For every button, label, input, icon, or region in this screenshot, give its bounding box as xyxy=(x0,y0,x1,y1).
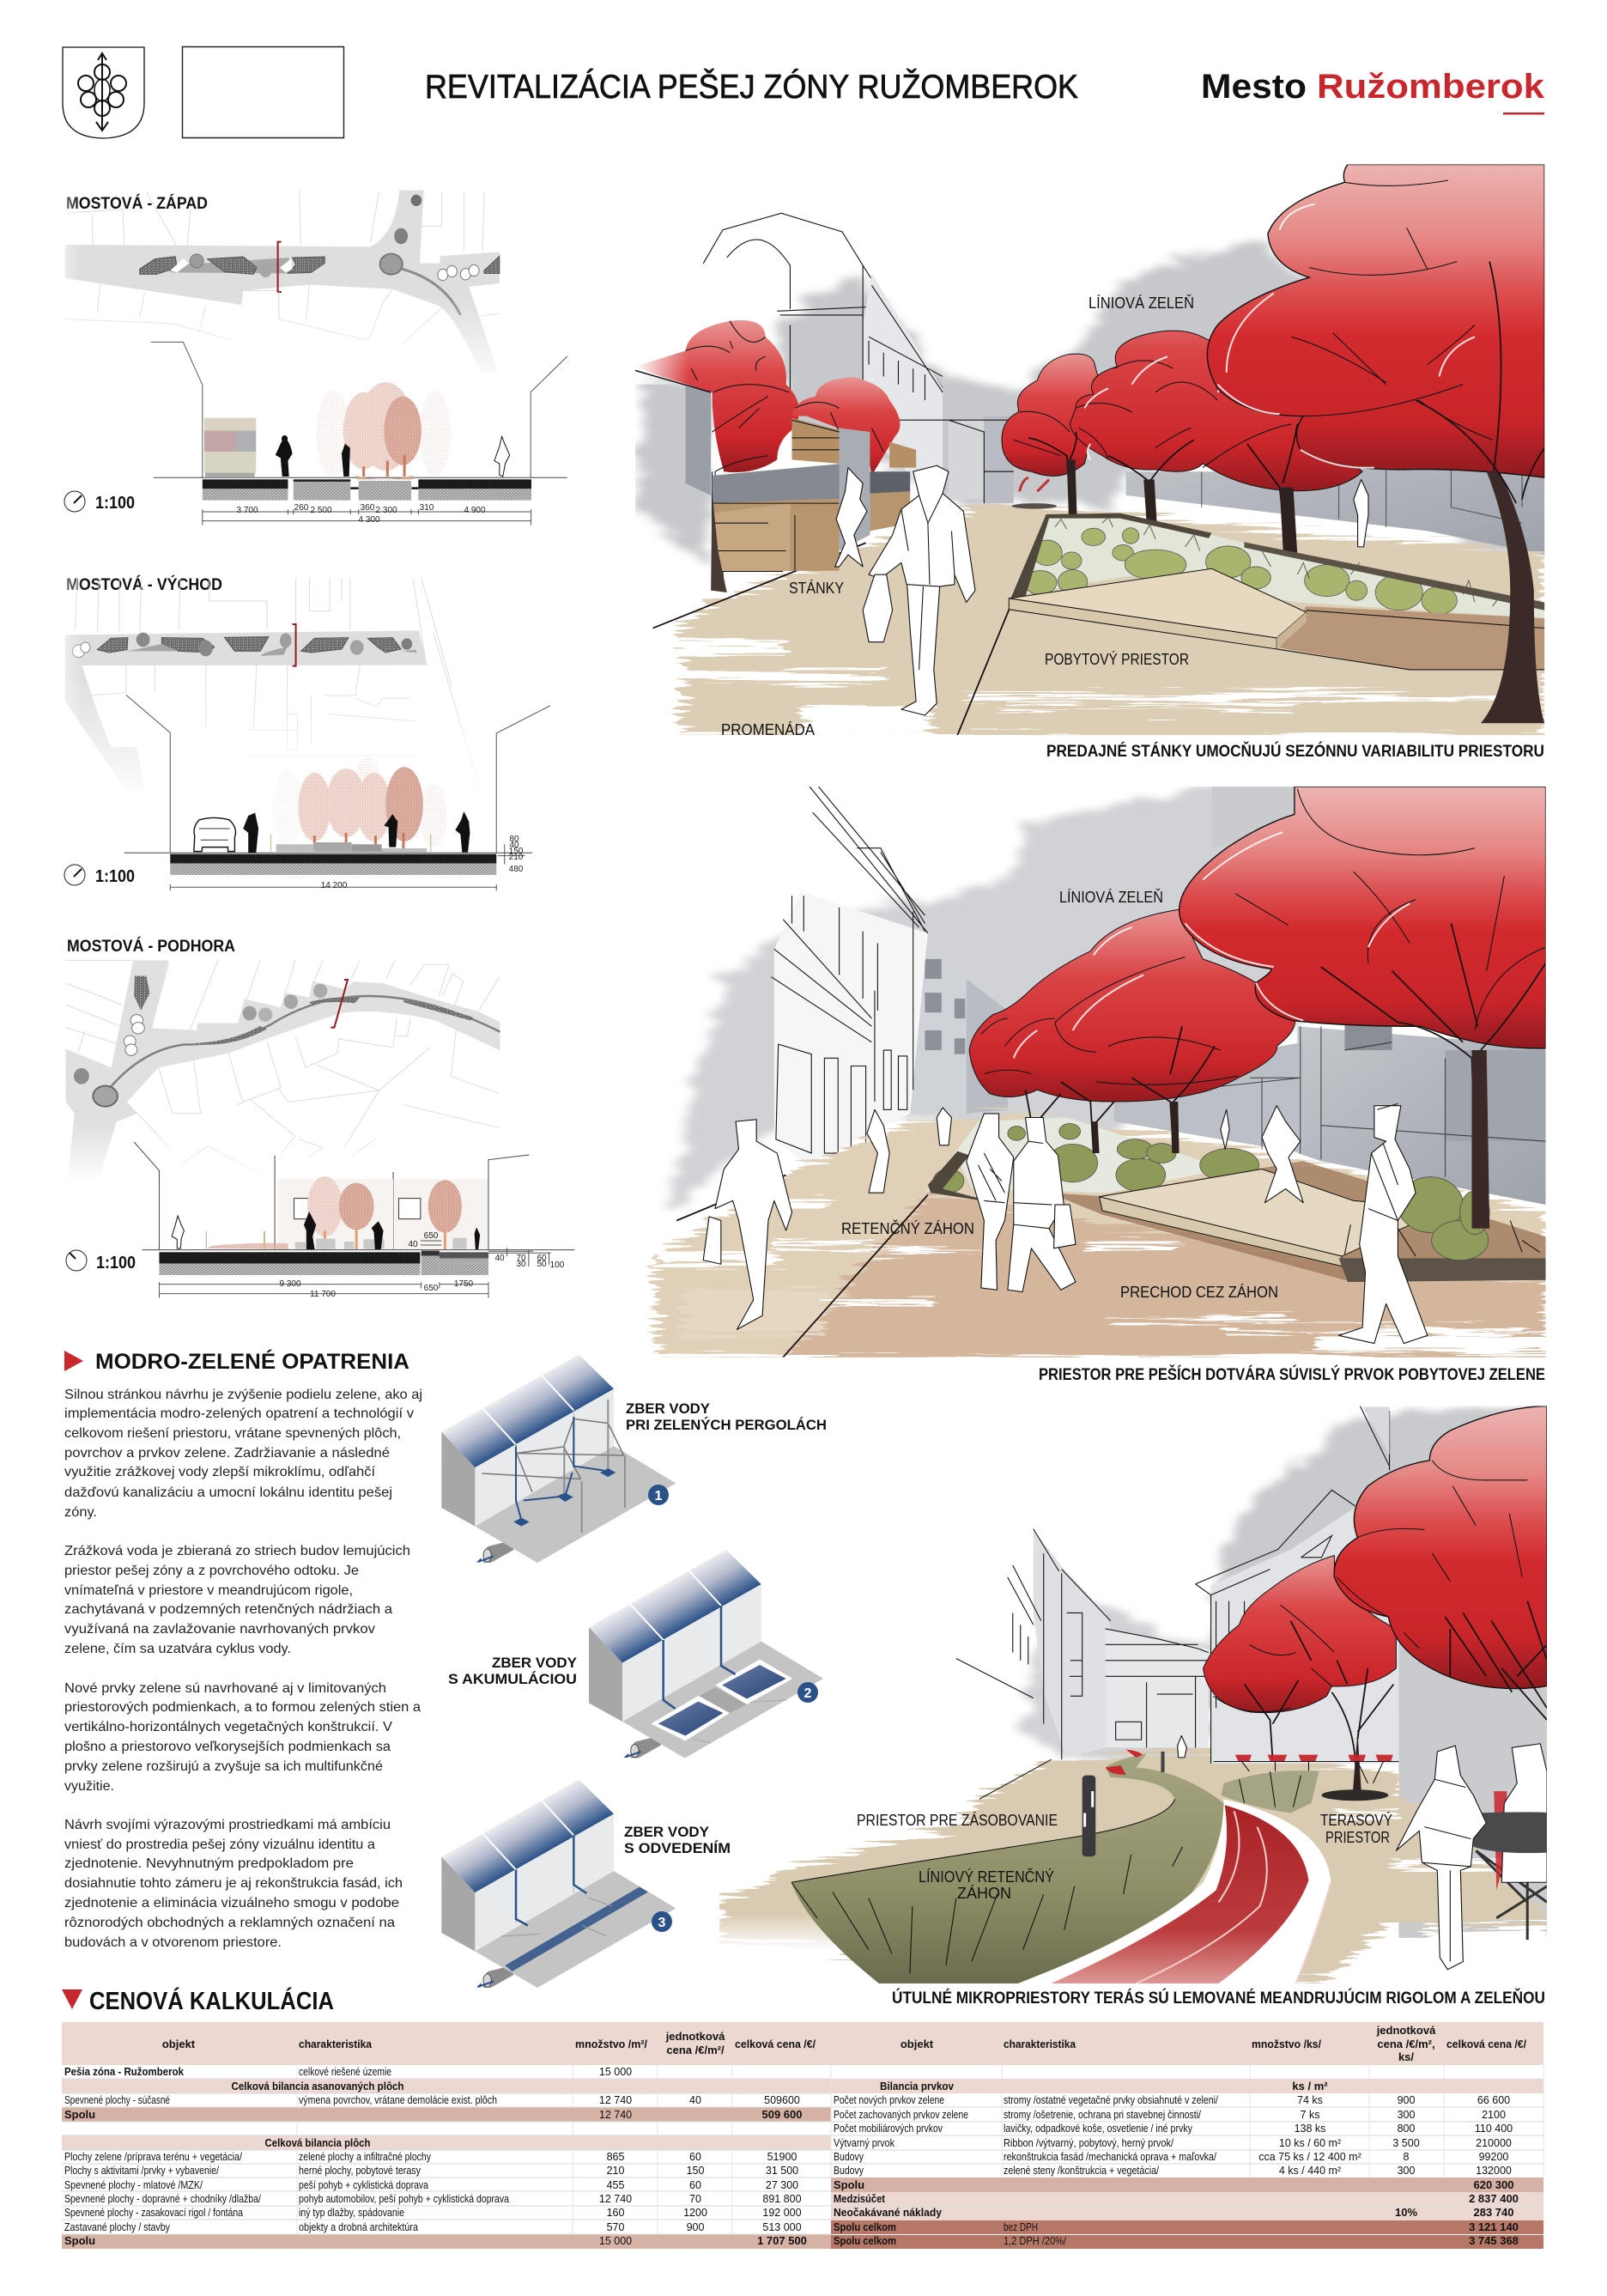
badge 2: 2 xyxy=(804,1686,812,1701)
table rows: Neočakávané náklady xyxy=(834,2206,943,2219)
heading: MOSTOVÁ - PODHORA xyxy=(67,937,235,956)
table rows: Počet zachovaných prvkov zelene xyxy=(834,2109,968,2121)
label: S ODVEDENÍM xyxy=(624,1840,731,1856)
street section xyxy=(124,695,550,890)
dimensions: 60 xyxy=(537,1254,547,1263)
table rows: Plochy s aktivitami /prvky + vybavenie/ xyxy=(64,2165,219,2177)
table rows: 99200 xyxy=(1479,2151,1508,2163)
illustration xyxy=(719,1406,1548,1985)
dimensions xyxy=(279,1231,565,1299)
table rows: 3 500 xyxy=(1392,2137,1420,2149)
dimensions: 100 xyxy=(550,1260,565,1270)
table header: objekt xyxy=(162,2038,196,2050)
label: PRI ZELENÝCH PERGOLÁCH xyxy=(626,1417,827,1433)
illustration xyxy=(653,787,1546,1358)
body text: plošno a priestorovo veľkorysejších podmienkach sa xyxy=(64,1740,391,1754)
dimensions xyxy=(236,503,486,525)
heading: cenová kalkulácia: CENOVÁ KALKULÁCIA xyxy=(89,1986,334,2015)
table rows: Výtvarný prvok xyxy=(834,2137,895,2149)
hedge xyxy=(1222,1771,1319,1813)
body text: vertikálno-horizontálnych vegetačných konštrukcií. V xyxy=(64,1720,392,1734)
scale 1:100: 1:100 xyxy=(95,867,135,886)
table rows: 3 121 140 xyxy=(1469,2220,1519,2233)
table rows: 283 740 xyxy=(1473,2206,1514,2219)
table rows: lavičky, odpadkové koše, osvetlenie / iné prvky xyxy=(1004,2123,1193,2135)
label xyxy=(624,1824,731,1856)
badge 3 xyxy=(652,1911,672,1932)
labels: PRIESTOR xyxy=(1325,1829,1390,1846)
body text: implementácia modro-zelených opatrení a technológií v xyxy=(64,1406,414,1421)
diagram 1: pergolas xyxy=(441,1355,827,1563)
label xyxy=(626,1400,827,1433)
dimensions: 4 300 xyxy=(358,515,380,525)
table: cost calculation areas xyxy=(62,2022,831,2249)
table rows: 31 500 xyxy=(766,2165,798,2177)
table rows: 40 xyxy=(689,2094,701,2106)
table rows: Celková bilancia asanovaných plôch xyxy=(232,2080,404,2093)
scale 1:100: 1:100 xyxy=(96,1254,136,1273)
table rows: 891 800 xyxy=(762,2193,802,2205)
panel: visualization 3 - terraces xyxy=(719,1406,1548,2007)
table rows: Spolu celkom xyxy=(834,2220,896,2233)
trees xyxy=(1204,1556,1396,1713)
table rows: 160 xyxy=(607,2207,624,2219)
table rows: 15 000 xyxy=(599,2235,632,2247)
heading: MOSTOVÁ - VÝCHOD xyxy=(66,575,222,594)
labels: PRECHOD CEZ ZÁHON xyxy=(1120,1284,1278,1301)
dimensions: 9 300 xyxy=(279,1279,301,1289)
caption: ÚTULNÉ MIKROPRIESTORY TERÁS SÚ LEMOVANÉ MEANDRUJÚCIM RIGOLOM A ZELEŇOU xyxy=(892,1989,1545,2007)
dimensions: 1750 xyxy=(454,1279,474,1289)
figures xyxy=(835,468,867,567)
table rows: 51900 xyxy=(767,2151,797,2163)
body text: povrchov a prvkov zelene. Zadržiavanie a následné xyxy=(64,1446,390,1461)
illustration xyxy=(623,165,1544,737)
city logo: Mesto Ružomberok: Mesto xyxy=(1201,68,1307,106)
table: cost calculation elements xyxy=(831,2022,1543,2249)
table header: celková cena /€/ xyxy=(1446,2038,1526,2050)
scale 1:100 xyxy=(66,1250,136,1273)
table rows: 620 300 xyxy=(1473,2178,1514,2191)
dimensions: 650 xyxy=(424,1231,439,1241)
body text: využitie. xyxy=(64,1779,114,1794)
planters xyxy=(925,1118,1262,1193)
dimensions xyxy=(321,835,524,890)
table header: cena /€/m²/ xyxy=(666,2044,725,2056)
labels: RETENČNÝ ZÁHON xyxy=(841,1219,974,1237)
table rows: Spolu xyxy=(64,2234,95,2247)
scale 1:100 xyxy=(64,491,135,513)
table rows: bez DPH xyxy=(1004,2221,1038,2233)
body text: využitie zrážkovej vody zlepší mikroklímu, odľahčí xyxy=(64,1465,376,1479)
labels: TERASOVÝ xyxy=(1320,1812,1392,1829)
body text: prvky zelene rozširujú a zvyšuje sa ich multifunkčné xyxy=(64,1759,383,1774)
table rows: Budovy xyxy=(834,2151,864,2163)
dimensions: 40 xyxy=(494,1254,505,1263)
table rows: 2 837 400 xyxy=(1469,2192,1519,2205)
table rows: stromy /ostatné vegetačné prvky obsiahnuté v zeleni/ xyxy=(1004,2094,1218,2106)
table rows: 192 000 xyxy=(762,2207,802,2219)
body text: priestor pešej zóny a z povrchového odtoku. Je xyxy=(64,1564,359,1578)
diagram 2: accumulation xyxy=(448,1550,823,1758)
dimensions: 650 xyxy=(424,1284,439,1293)
table rows: Počet nových prvkov zelene xyxy=(834,2094,944,2106)
label xyxy=(448,1655,578,1687)
table rows: 513 000 xyxy=(762,2221,802,2233)
body text: využívaná na zavlažovanie navrhovaných prvkov xyxy=(64,1622,375,1637)
header logos xyxy=(63,46,343,138)
table header: charakteristika xyxy=(299,2038,373,2050)
table rows: Spevnené plochy - dopravné + chodníky /dlažba/ xyxy=(64,2193,261,2205)
dimensions: 50 xyxy=(537,1260,547,1269)
table rows: Počet mobiliárových prvkov xyxy=(834,2123,943,2135)
table rows: Spolu celkom xyxy=(834,2234,896,2247)
table rows: zelené steny /konštrukcia + vegetácia/ xyxy=(1004,2165,1159,2177)
bollard xyxy=(1082,1776,1095,1856)
dimensions: 80 xyxy=(509,835,519,844)
table rows: 138 ks xyxy=(1295,2123,1325,2135)
table rows: 800 xyxy=(1398,2123,1415,2135)
dimensions: 70 xyxy=(516,1254,526,1263)
table header: jednotková xyxy=(665,2030,725,2043)
table rows: 4 ks / 440 m² xyxy=(1279,2165,1341,2177)
labels xyxy=(857,1812,1392,1902)
planter xyxy=(1010,513,1544,618)
dimensions: 4 900 xyxy=(464,506,486,515)
table rows: Medzisúčet xyxy=(834,2192,886,2205)
site plan xyxy=(43,960,540,1185)
table rows: 1200 xyxy=(683,2207,707,2219)
table rows: cca 75 ks / 12 400 m² xyxy=(1258,2151,1361,2163)
label: ZBER VODY xyxy=(492,1655,578,1671)
labels: POBYTOVÝ PRIESTOR xyxy=(1045,651,1189,668)
middle trees xyxy=(1002,354,1102,476)
body text: zachytávaná v podzemných retenčných nádržiach a xyxy=(64,1602,392,1617)
table rows: 74 ks xyxy=(1297,2094,1323,2106)
labels: ZÁHON xyxy=(957,1885,1011,1902)
table header: ks/ xyxy=(1398,2050,1414,2063)
caption: PREDAJNÉ STÁNKY UMOCŇUJÚ SEZÓNNU VARIABILITU PRIESTORU xyxy=(1046,742,1544,761)
table rows: ks / m² xyxy=(1292,2080,1328,2093)
dimensions: 3 700 xyxy=(236,506,258,515)
table rows: 12 740 xyxy=(599,2094,632,2106)
icon: city coat of arms xyxy=(63,47,144,138)
dimensions: 40 xyxy=(408,1240,418,1249)
table rows: 210000 xyxy=(1476,2137,1512,2149)
table rows xyxy=(834,2080,1519,2247)
table rows: 509600 xyxy=(764,2094,800,2106)
badge 2 xyxy=(797,1682,818,1703)
table rows: pohyb automobilov, peší pohyb + cyklistická doprava xyxy=(299,2193,509,2205)
table rows: 10% xyxy=(1395,2206,1417,2219)
table rows: 12 740 xyxy=(599,2109,632,2121)
table rows: 900 xyxy=(1398,2094,1415,2106)
table header xyxy=(162,2030,816,2056)
caption: PRIESTOR PRE PEŠÍCH DOTVÁRA SÚVISLÝ PRVOK POBYTOVEJ ZELENE xyxy=(1039,1365,1545,1384)
table rows: herné plochy, pobytové terasy xyxy=(299,2165,421,2177)
big tree xyxy=(1207,165,1544,477)
empty logo frame xyxy=(182,46,343,137)
dimensions: 210 xyxy=(509,853,524,862)
table header xyxy=(901,2024,1526,2063)
heading: MOSTOVÁ - ZÁPAD xyxy=(66,194,208,213)
body text xyxy=(64,1388,422,1950)
labels: PRIESTOR PRE ZÁSOBOVANIE xyxy=(857,1812,1058,1829)
table rows: Plochy zelene /príprava terénu + vegetácia/ xyxy=(64,2151,242,2163)
body text: Zrážková voda je zbieraná zo striech budov lemujúcich xyxy=(64,1544,410,1558)
table rows: 66 600 xyxy=(1477,2094,1510,2106)
site plan xyxy=(43,575,505,805)
table rows: celkové riešené územie xyxy=(299,2066,391,2078)
table rows: 7 ks xyxy=(1301,2109,1319,2121)
panel: visualization 1 - stalls xyxy=(623,165,1544,761)
city logo: Mesto Ružomberok xyxy=(1201,68,1545,115)
table rows: 10 ks / 60 m² xyxy=(1279,2137,1341,2149)
body text: zelene, čím sa uzatvára cyklus vody. xyxy=(64,1642,291,1656)
scale 1:100: 1:100 xyxy=(95,494,135,513)
table and figures xyxy=(1178,1736,1186,1758)
diagram 3: drainage xyxy=(441,1779,731,1988)
dimensions: 14 200 xyxy=(321,881,348,890)
labels: STÁNKY xyxy=(789,580,844,597)
table rows: 110 400 xyxy=(1475,2123,1513,2135)
body text: zjednotenie a eliminácia vizuálneho smogu v podobe xyxy=(64,1896,399,1910)
table rows: 570 xyxy=(607,2221,624,2233)
labels xyxy=(721,295,1194,738)
dimensions: 360 xyxy=(361,503,375,513)
dimensions: 260 xyxy=(294,503,309,513)
body text: Nové prvky zelene sú navrhované aj v limitovaných xyxy=(64,1681,386,1696)
trees xyxy=(969,909,1295,1102)
table rows: rekonštrukcia fasád /mechanická oprava + maľovka/ xyxy=(1004,2151,1216,2163)
table rows: 1 707 500 xyxy=(757,2234,807,2247)
table header: množstvo /ks/ xyxy=(1252,2038,1321,2050)
panel: modro-zelené opatrenia text xyxy=(64,1349,422,1950)
dimensions: 40 xyxy=(509,841,519,850)
table rows: 60 xyxy=(689,2151,701,2163)
table header: charakteristika xyxy=(1004,2038,1076,2050)
table rows: zelené plochy a infiltračné plochy xyxy=(299,2151,432,2163)
figures xyxy=(715,1120,792,1329)
table header: jednotková xyxy=(1376,2024,1436,2037)
body text: dosiahnutie tohto zámeru je aj rekonštrukcia fasád, ich xyxy=(64,1876,403,1891)
city logo: Mesto Ružomberok: Ružomberok xyxy=(1317,68,1545,106)
badge 1 xyxy=(648,1485,669,1505)
table rows: 900 xyxy=(687,2221,704,2233)
label: S AKUMULÁCIOU xyxy=(448,1671,577,1687)
labels: PROMENÁDA xyxy=(721,721,815,738)
table rows: Spevnené plochy - súčasné xyxy=(64,2094,170,2106)
label: ZBER VODY xyxy=(624,1824,710,1840)
table rows: 2100 xyxy=(1482,2109,1506,2121)
table rows: Celková bilancia plôch xyxy=(264,2136,371,2149)
badge 3: 3 xyxy=(658,1916,666,1930)
body text: Silnou stránkou návrhu je zvýšenie podielu zelene, ako aj xyxy=(64,1388,422,1402)
table rows: 150 xyxy=(687,2165,704,2177)
table rows: Budovy xyxy=(834,2165,864,2177)
table rows: 60 xyxy=(689,2179,701,2191)
panel: water diagrams xyxy=(441,1355,827,1988)
red meandering channel xyxy=(1018,1799,1331,1983)
dimensions: 30 xyxy=(516,1260,526,1269)
table rows: 300 xyxy=(1398,2165,1415,2177)
label: ZBER VODY xyxy=(626,1400,711,1417)
buildings xyxy=(1034,1530,1111,1758)
dimensions: 150 xyxy=(509,847,524,856)
table rows: 8 xyxy=(1404,2151,1410,2163)
dimensions: 480 xyxy=(509,865,524,874)
body text: celkovom riešení priestoru, vrátane spevnených plôch, xyxy=(64,1426,401,1441)
left trees xyxy=(635,320,799,472)
table rows: Spevnené plochy - mlatové /MZK/ xyxy=(64,2179,203,2191)
table rows: Ribbon /výtvarný, pobytový, herný prvok/ xyxy=(1004,2137,1173,2149)
body text: zóny. xyxy=(64,1505,97,1520)
scale 1:100 xyxy=(64,865,135,886)
dimensions: 310 xyxy=(420,503,434,513)
body text: vnímateľná v priestore v meandrujúcom rigole, xyxy=(64,1583,353,1598)
table rows: Bilancia prvkov xyxy=(880,2080,955,2093)
table rows: iný typ dlažby, spádovanie xyxy=(299,2207,404,2219)
table rows: Spolu xyxy=(834,2178,864,2191)
table rows: 210 xyxy=(607,2165,624,2177)
labels: LÍNIOVÁ ZELEŇ xyxy=(1059,889,1163,906)
labels: LÍNIOVÝ RETENČNÝ xyxy=(919,1868,1054,1886)
table rows: 15 000 xyxy=(599,2066,632,2078)
street section xyxy=(151,342,567,525)
table rows: výmena povrchov, vrátane demolácie exist. plôch xyxy=(299,2094,497,2106)
title: REVITALIZÁCIA PEŠEJ ZÓNY RUŽOMBEROK xyxy=(425,68,1078,106)
table rows: objekty a drobná architektúra xyxy=(299,2221,418,2233)
site plan xyxy=(43,189,518,386)
table rows: Pešia zóna - Ružomberok xyxy=(64,2065,185,2078)
dimensions: 11 700 xyxy=(310,1290,336,1299)
table rows: 300 xyxy=(1398,2109,1415,2121)
badge 1: 1 xyxy=(655,1489,663,1503)
body text: Návrh svojími výrazovými prostriedkami má ambíciu xyxy=(64,1818,391,1832)
table rows: Spevnené plochy - zasakovací rigol / fontána xyxy=(64,2207,243,2219)
panel: Mostová - východ xyxy=(43,575,550,890)
street section xyxy=(134,1142,574,1298)
dimensions: 2 300 xyxy=(375,506,397,515)
table header: objekt xyxy=(901,2038,934,2050)
table header: cena /€/m², xyxy=(1377,2038,1435,2050)
heading: MODRO-ZELENÉ OPATRENIA xyxy=(95,1349,409,1374)
labels xyxy=(841,889,1278,1301)
panel: visualization 2 - pedestrian street xyxy=(653,787,1546,1384)
cafe chairs xyxy=(1235,1755,1393,1761)
table rows: 865 xyxy=(607,2151,624,2163)
table header: celková cena /€/ xyxy=(735,2038,816,2050)
body text: rôznorodých obchodných a reklamných označení na xyxy=(64,1916,395,1930)
panel: Mostová - Podhora xyxy=(43,937,574,1299)
panel: Mostová - západ xyxy=(43,189,567,525)
table header: množstvo /m²/ xyxy=(575,2038,647,2050)
table rows xyxy=(64,2065,807,2247)
table rows: 3 745 368 xyxy=(1469,2234,1519,2247)
table rows: 27 300 xyxy=(766,2179,798,2191)
body text: budovách a v otvorenom priestore. xyxy=(64,1935,282,1950)
dimensions: 2 500 xyxy=(310,506,332,515)
table rows: 132000 xyxy=(1476,2165,1512,2177)
table rows: peší pohyb + cyklistická doprava xyxy=(299,2179,428,2191)
body text: priestorových podmienkach, a to formou zelených stien a xyxy=(64,1700,421,1715)
body text: vniesť do prostredia pešej zóny vizuálnu identitu a xyxy=(64,1837,375,1852)
table rows: 70 xyxy=(689,2193,701,2205)
table rows: stromy /ošetrenie, ochrana pri stavebnej činnosti/ xyxy=(1004,2109,1201,2121)
labels: LÍNIOVÁ ZELEŇ xyxy=(1089,295,1194,312)
table rows: 12 740 xyxy=(599,2193,632,2205)
body text: zjednotenie. Nevyhnutným predpokladom pre xyxy=(64,1856,354,1871)
table rows: Zastavané plochy / stavby xyxy=(64,2221,171,2233)
body text: dažďovú kanalizáciu a umocní lokálnu identitu pešej xyxy=(64,1485,392,1500)
table rows: Spolu xyxy=(64,2108,95,2121)
table rows: 1,2 DPH /20%/ xyxy=(1004,2235,1066,2247)
table rows: 455 xyxy=(607,2179,624,2191)
icon: red triangle xyxy=(64,1351,83,1371)
table rows: 509 600 xyxy=(762,2108,802,2121)
